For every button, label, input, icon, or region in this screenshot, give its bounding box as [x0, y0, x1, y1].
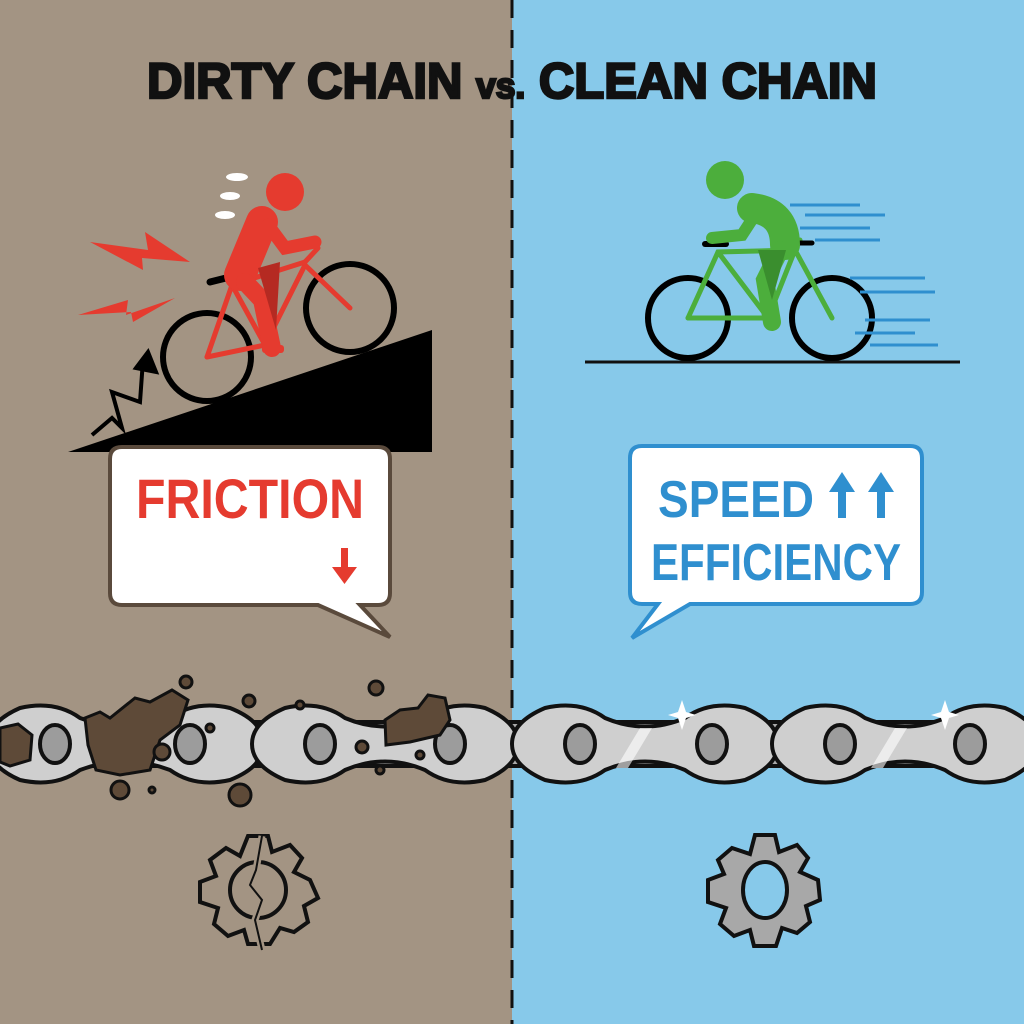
callout: speed efficiency: EFFICIENCY	[651, 534, 901, 592]
sparkles	[616, 700, 959, 768]
background right	[512, 0, 1024, 1024]
icon: broken gear	[200, 836, 318, 950]
title: DIRTY CHAIN vs. CLEAN CHAIN	[147, 53, 877, 109]
dirt clumps	[0, 676, 450, 806]
slope	[68, 330, 432, 452]
callout: speed efficiency: SPEED	[658, 471, 814, 529]
background left	[0, 0, 512, 1024]
callout: friction	[110, 447, 390, 637]
callout: friction: FRICTION	[136, 467, 364, 530]
icon: zigzag arrow	[92, 352, 156, 435]
icon: clean gear	[708, 835, 820, 946]
callout: speed efficiency	[630, 446, 922, 638]
red cyclist	[163, 173, 394, 401]
chain	[0, 706, 1024, 782]
icon: red lightning	[78, 232, 190, 322]
green cyclist	[585, 161, 960, 362]
